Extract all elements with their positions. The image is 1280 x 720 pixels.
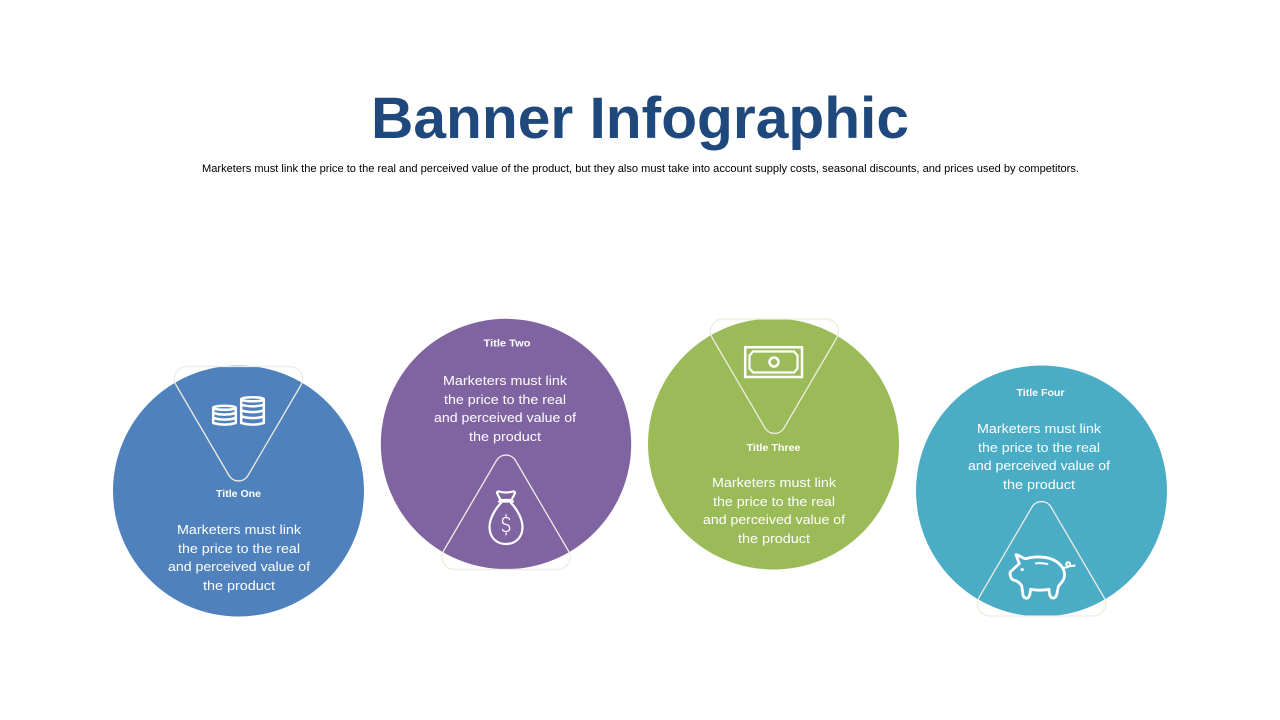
heading: title three: Title Three	[746, 442, 801, 454]
heading: title one: Title One	[216, 488, 261, 500]
text: title two body: Marketers must link	[443, 373, 567, 388]
panel: title three	[648, 318, 899, 570]
triangle outline: title three	[710, 319, 839, 433]
text: title four body: Marketers must link	[977, 421, 1101, 436]
text: title one body	[168, 522, 310, 593]
circle: title one	[113, 366, 364, 616]
text: title two body: the product	[469, 429, 541, 444]
text: title one body: the product	[203, 578, 275, 593]
triangle outline: title one	[174, 366, 303, 481]
text: title one body: the price to the real	[178, 541, 300, 556]
text: title three body	[703, 475, 845, 546]
circle: title three	[648, 318, 899, 570]
icon: banknote	[745, 347, 802, 377]
text: title four body: and perceived value of	[968, 458, 1110, 473]
icon: money bag	[490, 492, 522, 544]
icon: piggy bank	[1010, 555, 1075, 598]
triangle outline: title two	[442, 455, 570, 570]
heading: title four: Title Four	[1016, 387, 1064, 399]
text: title one body: and perceived value of	[168, 559, 310, 574]
text: title three body: and perceived value of	[703, 512, 845, 527]
text: title one body: Marketers must link	[177, 522, 301, 537]
text: title three body: the product	[738, 531, 810, 546]
text: title two body: the price to the real	[444, 392, 566, 407]
circle: title four	[916, 366, 1167, 616]
text: title four body: the price to the real	[978, 440, 1100, 455]
subtitle: Marketers must link the price to the real and perceived value of the product, but they also must take into account supply costs, seasonal discounts, and prices used by competitors.	[202, 163, 1079, 175]
text: title three body: Marketers must link	[712, 475, 836, 490]
text: title two body: and perceived value of	[434, 410, 576, 425]
circle: title two	[381, 319, 631, 569]
panel: title one	[113, 366, 364, 616]
text: title four body: the product	[1003, 477, 1075, 492]
panel: title four	[916, 366, 1167, 616]
triangle outline: title four	[977, 502, 1106, 616]
icon: coins	[213, 397, 264, 425]
text: title two body	[434, 373, 576, 444]
text: title four body	[968, 421, 1110, 492]
panel: title two	[381, 319, 631, 570]
heading: title two: Title Two	[484, 338, 530, 350]
title: Banner Infographic	[371, 86, 909, 151]
text: title three body: the price to the real	[713, 494, 835, 509]
